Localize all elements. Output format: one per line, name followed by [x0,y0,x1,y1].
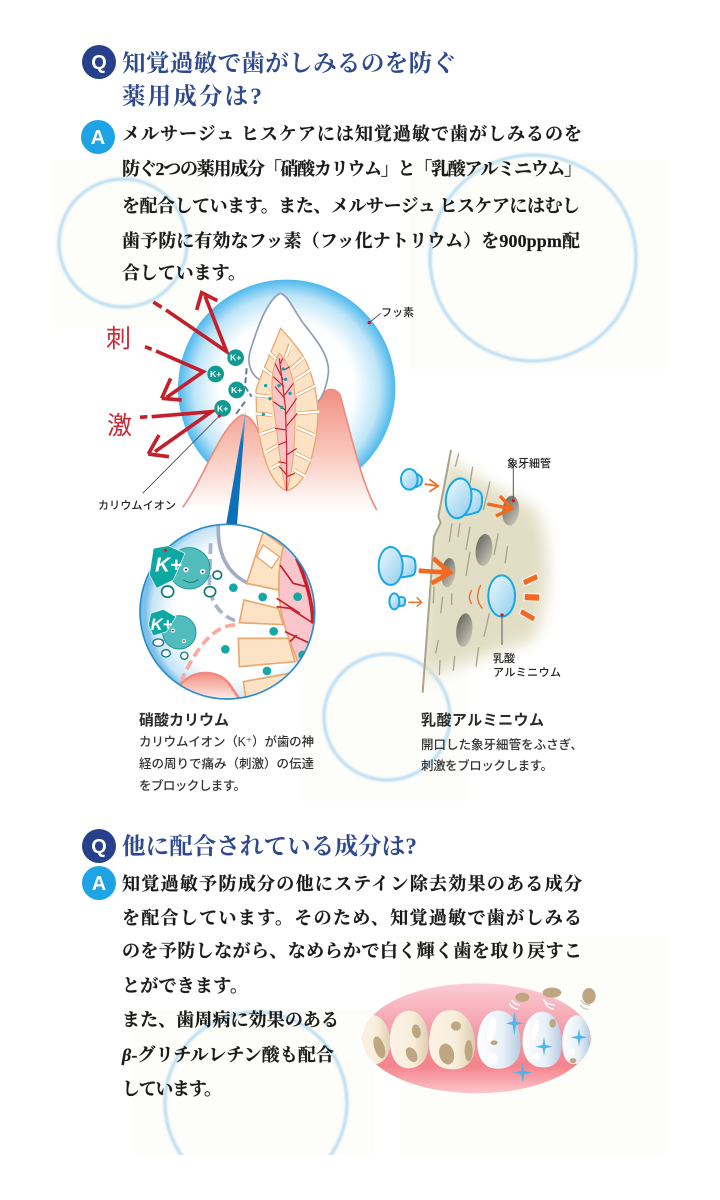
answer text: また、歯周病に効果のある [122,1010,339,1030]
dentin slab [420,460,548,678]
caption: aluminum lactate: 乳酸アルミニウム [421,711,544,729]
icon: Q badge [82,45,116,79]
answer text: を配合しています。また、メルサージュ ヒスケアにはむし [122,196,580,216]
answer text: のを予防しながら、なめらかで白く輝く歯を取り戻すこ [122,940,582,961]
dashed boundary [236,368,252,414]
answer text: とができます。 [122,976,248,996]
sparkles [506,1012,587,1083]
block marks [519,573,540,622]
tooth diagram [140,280,395,510]
nerve tree [273,358,297,491]
potassium ions: K+ [210,369,221,379]
tooth root [253,328,319,491]
potassium ions: K+ [217,403,228,413]
caption: potassium nitrate: 経の周りで痛み（刺激）の伝達 [139,756,314,771]
plugs [379,469,515,617]
caption: potassium nitrate: をブロックします。 [139,778,246,793]
label: fluoride: フッ素 [381,305,414,319]
enamel corner [220,525,262,544]
heading text [122,50,456,110]
answer text: 歯予防に有効なフッ素（フッ化ナトリウム）を900ppm配 [122,230,580,251]
root slat outlines [255,344,318,476]
caption: potassium nitrate [139,711,314,793]
caption: aluminum lactate: 刺激をブロックします。 [421,758,553,773]
icon: Q badge [82,829,116,863]
caption: potassium nitrate: 硝酸カリウム [139,711,229,729]
answer text [122,124,582,283]
caption: potassium nitrate: カリウムイオン（K⁺）が歯の神 [139,734,314,749]
caption: aluminum lactate: 開口した象牙細管をふさぎ、 [421,737,583,752]
teeth illustration [357,983,596,1093]
potassium ions: K+ [230,352,241,362]
label: 刺: 刺 [106,325,131,353]
mascot: large potassium ion [149,546,222,597]
nerves [277,565,313,643]
answer text: しています。 [122,1079,222,1099]
remaining stains [490,1019,576,1063]
flying stain particles [515,988,596,1004]
answer text: 防ぐ2つの薬用成分「硝酸カリウム」と「乳酸アルミニウム」 [122,158,582,179]
icon: A badge: A [91,127,105,149]
icon: Q badge: Q [91,52,107,74]
icon: A badge [82,866,116,900]
pulp [278,546,314,663]
red arrow lines [140,293,227,457]
blue halo circle [178,280,395,497]
stains [371,1021,473,1066]
whitened teeth [477,1011,590,1069]
question 1 heading [82,45,456,110]
answer text: を配合しています。そのため、知覚過敏で歯がしみる [122,908,582,928]
icon: Q badge: Q [91,836,107,858]
small teal dots [262,367,292,416]
answer 1 [81,120,582,283]
answer text: β-グリチルレチン酸も配合 [121,1045,334,1065]
potassium ions: K+ [231,385,242,395]
tooth crown [249,293,328,402]
dashed lines [209,543,235,621]
label: aluminum lactate [493,651,561,679]
dentin blocks [238,532,300,700]
mascot: small potassium ion [148,609,196,659]
dentin tubule diagram [379,450,548,693]
caption: aluminum lactate [421,711,583,773]
label: aluminum lactate: アルミニウム [493,666,561,679]
gums [183,389,377,510]
icon: A badge: A [92,873,106,895]
background tints and pale circles [55,155,665,1194]
orange arrows [408,479,512,608]
pulp [272,353,295,491]
highlights [485,1016,575,1064]
stained teeth [357,1010,475,1069]
tubule marks [433,453,508,675]
answer text: 合しています。 [122,263,246,283]
leader lines [143,313,381,493]
tubule holes [440,495,521,647]
heading text: 他に配合されている成分は? [122,833,417,860]
label: dentinal tubules: 象牙細管 [507,456,551,470]
answer text [121,873,582,1099]
answer text: メルサージュ ヒスケアには知覚過敏で歯がしみるのを [122,124,582,144]
answer 2 [82,866,582,1099]
label: 激: 激 [107,412,132,440]
label: potassium ion: カリウムイオン [98,499,176,512]
label: aluminum lactate: 乳酸 [493,651,515,665]
leader lines [502,465,513,645]
potassium ions [207,349,245,417]
icon: A badge [81,120,115,154]
answer text: 知覚過敏予防成分の他にステイン除去効果のある成分 [122,873,582,894]
mascot: large potassium ion: K+ [155,554,182,577]
gum [180,672,240,698]
question 2 heading [82,829,417,863]
root white slats [253,343,319,477]
heading text: 知覚過敏で歯がしみるのを防ぐ [122,50,456,77]
teal dots [221,583,307,675]
heading text: 薬用成分は? [122,83,262,110]
blue wedge [226,408,246,525]
magnified circle [140,520,320,703]
mascot: small potassium ion: K+ [151,615,173,634]
